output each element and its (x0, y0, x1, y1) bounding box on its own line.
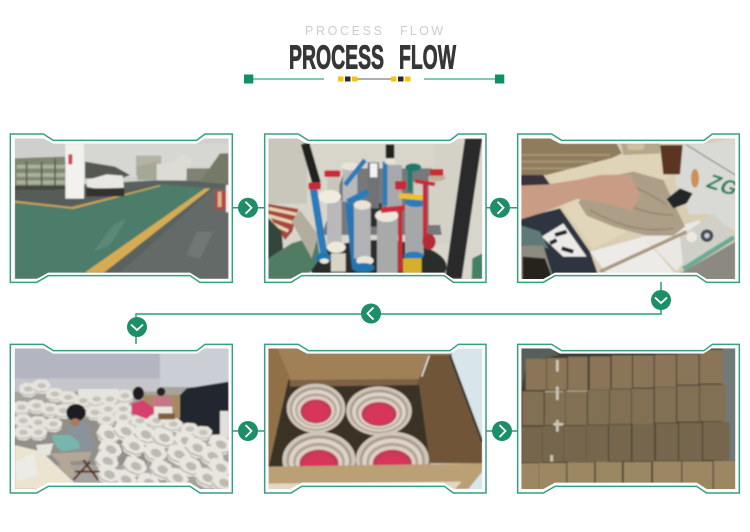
panel: warehouse photo (10, 134, 232, 282)
arrow: carton to stacked cartons (492, 421, 512, 441)
blue post left (313, 188, 324, 257)
arrow: workers to carton (238, 421, 258, 441)
frame (265, 344, 486, 493)
frame (10, 344, 232, 493)
arrow: connector down (127, 317, 147, 337)
panel: stacked cartons photo (518, 344, 739, 493)
arrow: warehouse to bobbins (238, 198, 258, 218)
title block (244, 24, 504, 84)
arrow: connector left (361, 304, 381, 324)
heading: process flow: PROCESS (289, 38, 384, 76)
right bobbin (404, 204, 425, 256)
frame (265, 134, 486, 282)
panel: workers with baskets photo (10, 344, 238, 497)
photo: stacked cartons (520, 347, 737, 490)
frame (10, 134, 232, 282)
subtitle: process flow (305, 24, 443, 38)
left bobbin (326, 199, 342, 246)
title ornament (244, 74, 504, 84)
panel: packed carton photo (265, 344, 486, 493)
arrow: sewing down (651, 290, 671, 310)
photo: sewing jute mat: ZG (702, 171, 743, 201)
background workers (132, 400, 157, 419)
arrow: bobbins to sewing (490, 198, 510, 218)
front bobbin (376, 218, 399, 273)
photo: sewing jute mat (520, 137, 743, 280)
connector lines (136, 208, 661, 431)
frame (518, 134, 739, 282)
heading: process flow: FLOW (399, 38, 456, 76)
subtitle: process flow: PROCESS (305, 24, 382, 38)
blue post middle (349, 203, 356, 268)
panel: braiding bobbins photo (265, 134, 486, 293)
photo: warehouse floor (13, 137, 230, 280)
photo: workers and baskets (14, 348, 229, 489)
panel: sewing machine photo (518, 134, 743, 282)
photo: baskets in carton (267, 347, 484, 490)
seated worker (15, 445, 75, 489)
frame (518, 344, 739, 493)
photo: bobbins (268, 138, 482, 279)
back bobbins (342, 169, 358, 202)
subtitle: process flow: FLOW (400, 24, 443, 38)
